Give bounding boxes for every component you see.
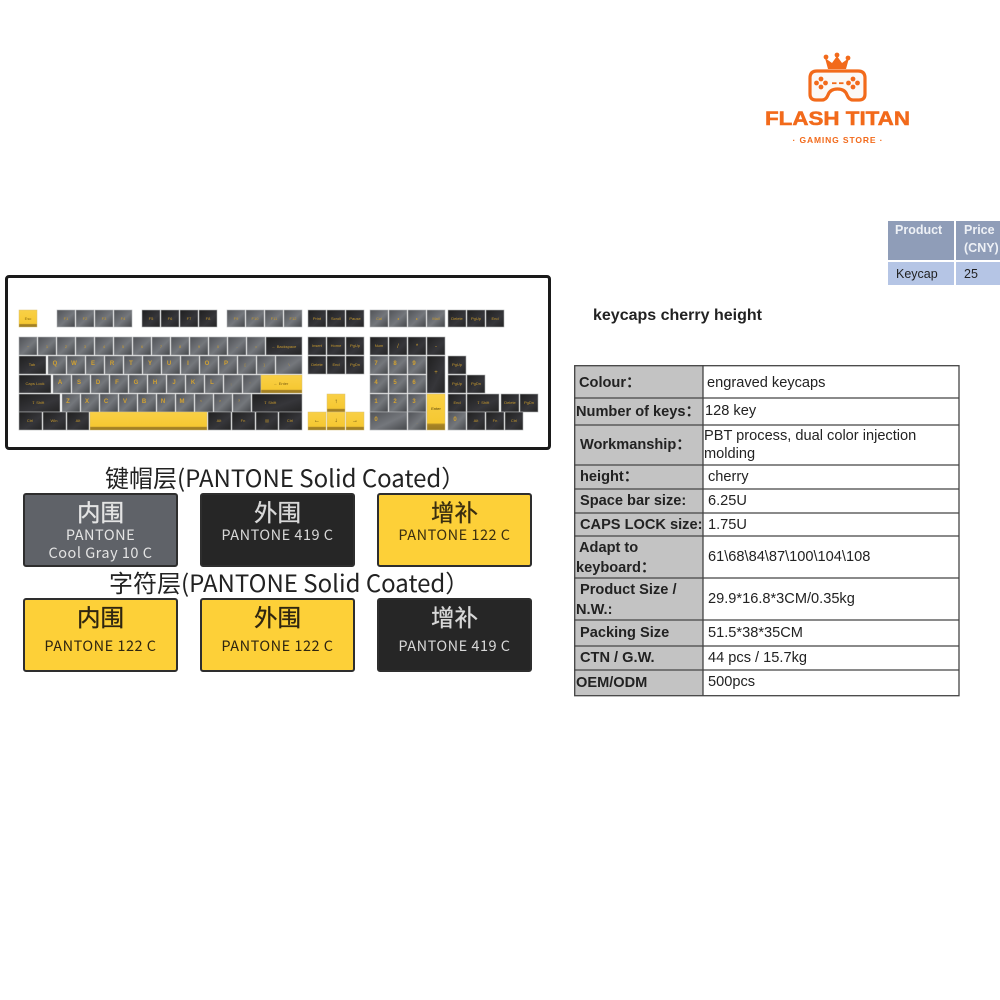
row: oem odm: OEM/ODM [576,675,647,691]
bottom row with space bar: Ctrl [27,418,33,423]
row: height: height： [580,469,638,485]
ASDF row: S [77,380,81,386]
ASDF row: ' [250,381,251,386]
QWERTY row: \ [288,362,290,367]
extra right cluster: Ctrl [511,418,517,423]
ZXCV row: ⇧ Shift [264,400,277,405]
number row: 8 [179,344,182,349]
numeric keypad: + [434,370,438,376]
number row: 1 [46,344,49,349]
numeric keypad: 1 [374,399,378,405]
icon: crown [824,53,850,69]
bottom row with space bar: Win [51,418,57,423]
header cell: price: Price [964,223,995,237]
function row: F4 [121,316,126,321]
number row: 9 [198,344,201,349]
extra right cluster: Alt [474,418,479,423]
cell: keycap [888,262,954,285]
value: space bar size: 6.25U [708,493,747,509]
value: caps lock size: 1.75U [708,517,747,533]
swatch title: 增补 [431,599,478,633]
arrow keys: ↑ [334,399,338,405]
numeric keypad: 9 [412,361,416,367]
numeric keypad [370,337,445,430]
QWERTY row: Y [148,361,152,367]
numeric keypad: 7 [374,361,378,367]
bottom row with space bar [19,412,302,430]
QWERTY row [19,356,302,374]
extra right cluster: 0 [453,417,457,423]
arrow keys: ← [314,418,320,424]
swatch code: PANTONE 419 C [398,635,511,656]
value: colour: engraved keycaps [707,375,825,391]
header cell: product: Product [895,223,942,237]
numeric keypad: 4 [374,380,378,386]
swatch title: 内围 [77,599,124,633]
function row [19,310,504,327]
function row: End [491,316,499,321]
ASDF row: D [96,380,101,386]
number row [19,337,302,355]
QWERTY row: R [110,361,115,367]
extra right cluster: Delete [504,400,517,405]
extra right cluster: PgDn [471,381,481,386]
row: adapt to keyboard: Adapt to [579,540,638,556]
function row: F9 [234,316,239,321]
function row: F5 [149,316,154,321]
bottom row with space bar: Alt [76,418,81,423]
header cell: price: (CNY) [964,241,999,255]
numeric keypad: 8 [393,361,397,367]
function row: F12 [290,316,297,321]
bottom row with space bar: ▤ [265,418,269,423]
ZXCV row: M [180,399,184,405]
ZXCV row: V [123,399,127,405]
value: height: cherry [708,469,749,485]
value: number of keys: 128 key [705,403,756,419]
ZXCV row [19,394,302,412]
arrow keys [308,394,364,430]
row: product size: Product Size / [580,582,676,598]
arrow keys: ↓ [334,418,338,424]
numeric keypad: . [416,420,418,425]
bottom row with space bar: Alt [217,418,222,423]
value: workmanship [704,428,916,462]
extra right cluster: PgDn [524,400,534,405]
function row: F1 [64,316,69,321]
navigation cluster: PgDn [350,362,360,367]
function row: Delete [451,316,464,321]
icon: game controller [810,71,865,100]
number row: 2 [65,344,68,349]
row: caps lock size: CAPS LOCK size: [580,517,702,533]
swatch title: 增补 [431,494,478,528]
extra right cluster: Fn [493,418,497,423]
value: oem odm: 500pcs [708,674,755,690]
swatch: accent keycap yellow [377,493,532,567]
function row: F7 [187,316,192,321]
QWERTY row: W [71,361,77,367]
spec table [574,365,960,696]
ZXCV row: B [142,399,147,405]
bottom row with space bar: Fn [241,418,245,423]
number row: = [255,344,258,349]
ZXCV row: C [104,399,109,405]
function row: Cal [376,316,382,321]
swatch title: 外围 [254,494,301,528]
logo: Flash Titan [765,52,910,145]
swatch code: PANTONE 419 C [221,524,334,545]
row: packing size: Packing Size [580,625,669,641]
numeric keypad: 2 [393,399,397,405]
navigation cluster: PgUp [350,343,361,348]
swatch code: PANTONE [66,524,135,545]
ASDF row: J [172,380,176,386]
function row: ◂ [397,316,399,321]
ZXCV row: N [161,399,165,405]
swatch title: 外围 [254,599,301,633]
navigation cluster: Insert [312,343,323,348]
ASDF row: F [115,380,119,386]
ASDF row: H [153,380,157,386]
QWERTY row: T [129,361,133,367]
ZXCV row: ? [238,398,241,403]
bottom row with space bar: Ctrl [287,418,293,423]
QWERTY row: ] [263,362,265,367]
numeric keypad: Num [375,343,384,348]
value: ctn gw: 44 pcs / 15.7kg [708,650,807,666]
ASDF row: A [58,380,63,386]
numeric keypad: 5 [393,380,397,386]
number row: ~ [27,344,30,349]
cell: 25 [956,262,1000,285]
ASDF row: ← Enter [274,381,289,386]
ZXCV row: Z [66,399,70,405]
ZXCV row: < [200,398,203,403]
function row: Pause [349,316,361,321]
number row: 6 [141,344,144,349]
value: workmanship: PBT process, dual color injection [704,428,916,444]
number row: ← Backspace [272,344,297,349]
function row: Esc [25,316,31,321]
numeric keypad: * [416,344,419,350]
price table [888,221,1000,285]
QWERTY row: P [224,361,228,367]
number row: 0 [217,344,220,349]
row: workmanship: Workmanship： [580,437,691,453]
navigation cluster: Delete [311,362,324,367]
swatch: outer legend yellow [200,598,355,672]
number row: 4 [103,344,106,349]
numeric keypad: 0 [374,417,378,423]
function row: F2 [83,316,88,321]
QWERTY row: Tab [29,362,36,367]
swatch: accent legend black [377,598,532,672]
ZXCV row: ⇧ Shift [32,400,45,405]
navigation cluster [308,337,364,374]
QWERTY row: I [187,361,189,367]
extra right cluster: PgUp [452,381,463,386]
QWERTY row: Q [53,361,58,367]
ASDF row [19,375,302,393]
navigation cluster: End [332,362,340,367]
row: adapt to keyboard second line: keyboard： [576,560,655,576]
swatch title: 内围 [77,494,124,528]
extra right cluster: End [453,400,461,405]
function row: Print [313,316,322,321]
function row: F8 [206,316,211,321]
row: number of keys: Number of keys： [576,404,700,420]
QWERTY row: U [167,361,171,367]
extra right cluster: ⇧ Shift [477,400,490,405]
cell: keycap: Keycap [896,267,938,281]
function row: F10 [252,316,259,321]
table grid [574,365,960,696]
swatch: inner legend yellow [23,598,178,672]
swatch: inner keycap gray [23,493,178,567]
swatch code: PANTONE 122 C [398,524,511,545]
QWERTY row: E [91,361,95,367]
swatch: outer keycap black [200,493,355,567]
extra right cluster: PgUp [452,362,463,367]
number row: 3 [84,344,87,349]
function row: ▸ [416,316,418,321]
logo tagline: · GAMING STORE · [792,135,882,145]
function row: F11 [271,316,278,321]
ZXCV row: > [219,398,222,403]
heading: legend layer: 字符层(PANTONE Solid Coated） [109,564,469,599]
swatch code: PANTONE 122 C [44,635,157,656]
numeric keypad: 6 [412,380,416,386]
row: colour: Colour： [579,375,641,391]
header cell: price [956,221,1000,260]
keyboard keys [18,310,538,430]
ASDF row: L [210,380,214,386]
QWERTY row: [ [244,362,246,367]
row: ctn gw: CTN / G.W. [580,650,655,666]
function row: F6 [168,316,173,321]
numeric keypad: - [435,344,437,350]
number row: 7 [160,344,163,349]
row: product size second line: N.W.: [576,602,612,618]
heading: keycap layer: 键帽层(PANTONE Solid Coated） [105,459,465,494]
label column background [574,365,703,696]
ASDF row: Caps Lock [26,381,44,386]
ASDF row: ; [230,381,232,386]
value: workmanship: molding [704,446,755,462]
swatch code [48,524,152,562]
function row: Scroll [331,316,341,321]
logo wordmark: FLASH TITAN [765,109,910,130]
function row: F3 [102,316,107,321]
value: packing size: 51.5*38*35CM [708,625,803,641]
swatch code: PANTONE 122 C [221,635,334,656]
ZXCV row: X [85,399,89,405]
function row: Mail [432,316,440,321]
number row: - [236,344,238,349]
swatch code: Cool Gray 10 C [48,542,152,562]
panel: keyboard layout [5,275,551,450]
ASDF row: K [191,380,196,386]
navigation cluster: Home [331,343,342,348]
numeric keypad: Enter [431,406,441,411]
function row: PgUp [471,316,482,321]
value: product size: 29.9*16.8*3CM/0.35kg [708,591,855,607]
heading: keycaps cherry height: keycaps cherry height [593,307,762,324]
number row: 5 [122,344,125,349]
numeric keypad: 3 [412,399,416,405]
row: space bar size: Space bar size: [580,493,686,509]
extra right cluster [448,356,538,430]
QWERTY row: O [205,361,210,367]
numeric keypad: / [397,344,399,350]
header cell: product [888,221,954,260]
arrow keys: → [352,418,358,424]
value: adapt to keyboard: 61\68\84\87\100\104\108 [708,549,870,565]
ASDF row: G [134,380,139,386]
cell: 25: 25 [964,267,978,281]
